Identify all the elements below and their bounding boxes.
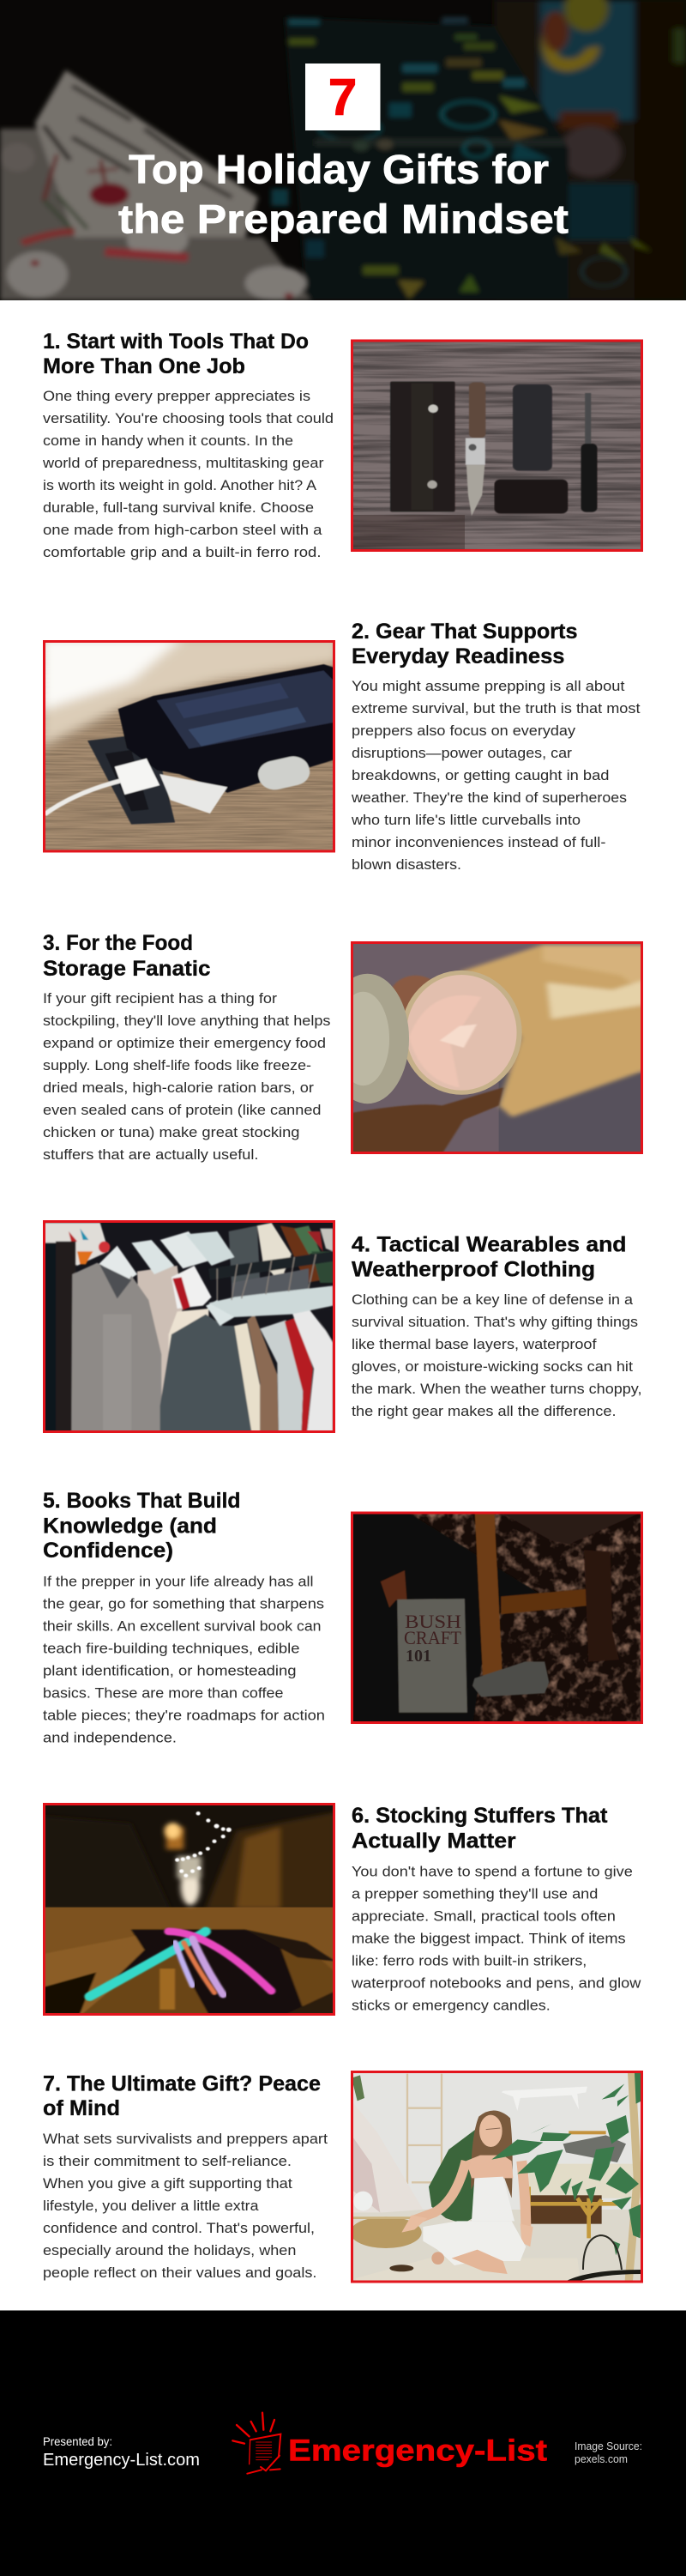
image: wrapped gifts background [0,0,686,300]
icon: checklist with rays [232,2413,280,2474]
body text [42,389,334,560]
panel: 5. books [43,1489,643,1745]
body text: You don't have to spend a fortune to give [352,1864,633,1879]
body text: make the biggest impact. Think of items [352,1931,626,1946]
body text: versatility. You're choosing tools that could [43,411,334,426]
body text [351,1864,641,2013]
heading [43,2071,321,2120]
body text: lifestyle, you deliver a little extra [43,2198,259,2214]
heading: 5. Books That Build [43,1489,240,1513]
image: bushcraft book and axe: CRAFT [404,1627,462,1648]
image: woman meditating [350,2071,643,2284]
heading [43,931,211,981]
body text: You might assume prepping is all about [352,679,625,694]
image source: Image Source: [575,2440,642,2452]
body text: come in handy when it counts. In the [43,433,293,449]
body text: weather. They're the kind of superheroes [351,790,627,806]
body text: their skills. An excellent survival book can [43,1618,321,1634]
body text: the mark. When the weather turns choppy, [352,1382,641,1397]
number box: 7 [328,69,357,125]
presented by [43,2434,200,2470]
body text: the right gear makes all the difference. [352,1404,616,1419]
body text: stuffers that are actually useful. [43,1147,259,1163]
body text: disruptions—power outages, car [352,746,573,761]
heading [43,1489,240,1563]
heading: 7. The Ultimate Gift? Peace [43,2071,321,2095]
body text: stockpiling, they'll love anything that helps [43,1013,331,1029]
body text: waterproof notebooks and pens, and glow [351,1975,641,1991]
presented by: Emergency-List.com [43,2451,200,2470]
body text [352,1292,641,1419]
body text: the gear, go for something that sharpens [43,1596,324,1612]
body text: and independence. [43,1730,177,1745]
body text: like: ferro rods with built-in strikers, [352,1953,587,1968]
body text: dried meals, high-calorie ration bars, or [43,1080,315,1096]
body text: Clothing can be a key line of defense in a [352,1292,634,1308]
heading: Weatherproof Clothing [352,1258,595,1282]
body text: comfortable grip and a built-in ferro rod. [43,545,321,560]
heading: Confidence) [43,1539,173,1563]
body text: When you give a gift supporting that [43,2176,292,2192]
image: glow sticks on a dark street [43,1803,336,2017]
body text: supply. Long shelf-life foods like freeze- [43,1058,311,1073]
heading: Knowledge (and [43,1514,217,1538]
panel: header banner [0,0,686,300]
body text: appreciate. Small, practical tools often [352,1908,616,1924]
body text: people reflect on their values and goals. [43,2265,316,2281]
heading: Storage Fanatic [43,957,211,981]
body text: table pieces; they're roadmaps for action [43,1708,325,1723]
body text: minor inconveniences instead of full- [352,835,605,850]
body text: What sets survivalists and preppers apart [43,2132,328,2147]
image source: pexels.com [575,2452,628,2465]
body text [351,679,641,873]
body text: If the prepper in your life already has all [43,1574,314,1589]
image: bushcraft book and axe [351,1512,643,1726]
heading: Actually Matter [352,1829,516,1853]
body text: world of preparedness, multitasking gear [42,456,324,471]
panel: footer [0,2310,686,2576]
panel: 7. peace of mind [43,2071,643,2284]
body text: survival situation. That's why gifting things [352,1315,638,1330]
image source [575,2440,642,2465]
body text [43,2132,328,2281]
heading: 6. Stocking Stuffers That [352,1804,608,1828]
title [118,146,569,242]
body text: sticks or emergency candles. [352,1998,551,2013]
body text: confidence and control. That's powerful, [43,2221,315,2236]
logo [232,2413,547,2474]
presented by: Presented by: [43,2434,112,2448]
wordmark: Emergency-List [288,2434,547,2468]
heading: 1. Start with Tools That Do [43,330,309,354]
heading: 4. Tactical Wearables and [352,1232,626,1256]
title: the Prepared Mindset [118,196,569,242]
panel: 3. food storage [43,931,647,1163]
body text: chicken or tuna) make great stocking [43,1125,300,1140]
heading [352,1232,626,1282]
heading [352,620,578,668]
body text: blown disasters. [352,857,461,873]
body text: gloves, or moisture-wicking socks can hit [352,1359,633,1375]
heading [352,1804,608,1853]
body text: especially around the holidays, when [43,2243,296,2259]
image: solar power bank [39,637,341,856]
body text: is worth its weight in gold. Another hit? A [43,478,316,493]
body text: basics. These are more than coffee [43,1685,283,1701]
body text: breakdowns, or getting caught in bad [352,768,609,783]
panel: 4. wearables [43,1220,641,1433]
body text: teach fire-building techniques, edible [43,1641,300,1656]
heading: of Mind [43,2096,120,2120]
body text: preppers also focus on everyday [352,723,576,739]
heading: Everyday Readiness [352,644,564,668]
body text: One thing every prepper appreciates is [43,389,310,404]
body text: durable, full-tang survival knife. Choose [43,500,314,516]
body text: expand or optimize their emergency food [43,1036,326,1051]
panel: 2. everyday gear [39,620,641,873]
heading [43,330,309,378]
body text: plant identification, or homesteading [43,1663,297,1678]
body text: a prepper something they'll use and [352,1886,598,1902]
image: clothes rack [43,1220,335,1433]
panel: 6. stocking stuffers [43,1803,641,2017]
body text: is their commitment to self-reliance. [43,2154,292,2169]
panel: 1. tools [42,330,643,560]
body text: like thermal base layers, waterproof [352,1337,597,1352]
image: open tin can of tuna [326,941,647,1156]
title: Top Holiday Gifts for [129,146,549,192]
body text: even sealed cans of protein (like canned [43,1103,321,1118]
heading: 2. Gear That Supports [352,620,578,644]
body text: extreme survival, but the truth is that most [352,701,641,717]
body text: who turn life's little curveballs into [351,813,581,828]
body text [43,991,331,1163]
body text: If your gift recipient has a thing for [43,991,278,1007]
image: knife and pocket gear on wood [351,340,643,552]
heading: 3. For the Food [43,931,193,955]
number box [305,63,381,130]
heading: More Than One Job [43,354,245,378]
body text: one made from high-carbon steel with a [43,523,322,538]
image: bushcraft book and axe: 101 [406,1647,431,1666]
body text [43,1574,325,1745]
image: bushcraft book and axe: BUSH [405,1611,461,1632]
